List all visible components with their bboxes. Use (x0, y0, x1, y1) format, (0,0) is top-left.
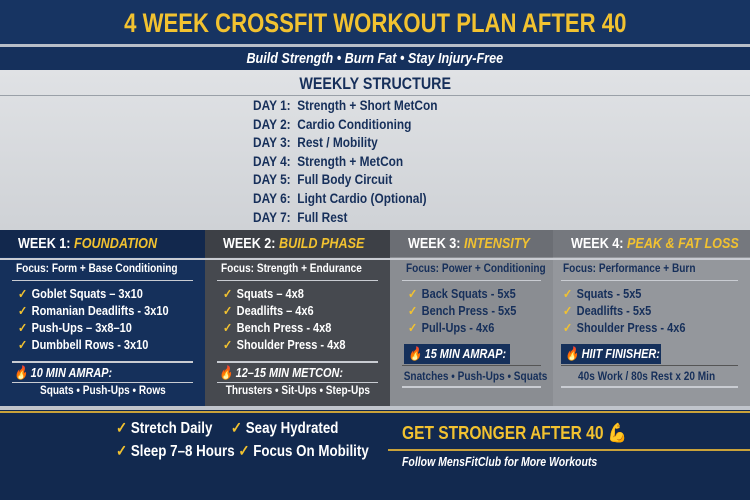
day list: DAY 6: Light Cardio (Optional) (253, 191, 427, 206)
panel: week 4: WEEK 4: PEAK & FAT LOSS (571, 235, 739, 252)
panel: weekly structure (0, 70, 750, 230)
day list: DAY 4: Strength + MetCon (253, 154, 403, 169)
day list: DAY 2: Cardio Conditioning (253, 117, 411, 132)
panel: week 2: ✓ Shoulder Press - 4x8 (223, 338, 345, 352)
panel: week 1: Squats • Push-Ups • Rows (40, 383, 165, 397)
panel: week 2: Thrusters • Sit-Ups • Step-Ups (225, 383, 370, 397)
footer text: Follow MensFitClub for More Workouts (402, 455, 597, 469)
panel: week 4: Focus: Performance + Burn (563, 261, 695, 275)
panel: week 3: ✓ Pull-Ups - 4x6 (408, 321, 494, 335)
title (0, 0, 750, 44)
panel: week 3: ✓ Back Squats - 5x5 (408, 287, 516, 301)
day list: DAY 5: Full Body Circuit (253, 172, 392, 187)
panel: week 2: ✓ Deadlifts – 4x6 (223, 304, 314, 318)
panel: week 2: WEEK 2: BUILD PHASE (223, 235, 364, 252)
day list: DAY 1: Strength + Short MetCon (253, 98, 437, 113)
panel: week 1: WEEK 1: FOUNDATION (18, 235, 157, 252)
panel: week 3: WEEK 3: INTENSITY (408, 235, 530, 252)
tips (116, 420, 369, 460)
day list (253, 98, 437, 225)
label: hiit finisher: 🔥 HIIT FINISHER: (565, 346, 660, 361)
callout: get stronger: GET STRONGER AFTER 40 💪 (402, 422, 627, 443)
panel: week 1: 🔥 10 MIN AMRAP: (14, 365, 112, 380)
panel: week 2: ✓ Bench Press - 4x8 (223, 321, 331, 335)
panel: week 1: Focus: Form + Base Conditioning (16, 261, 178, 275)
heading: weekly structure: WEEKLY STRUCTURE (299, 74, 451, 93)
panel: week 3 (390, 230, 553, 406)
panel: week 3: ✓ Bench Press - 5x5 (408, 304, 516, 318)
panel: week 2 (205, 230, 390, 406)
panel: week 3: Focus: Power + Conditioning (406, 261, 546, 275)
panel: week 2: 🔥 12–15 MIN METCON: (219, 365, 343, 380)
label: 15 min amrap: 🔥 15 MIN AMRAP: (408, 346, 506, 361)
label: 15 min amrap (404, 344, 510, 364)
day list: DAY 7: Full Rest (253, 210, 347, 225)
tips: ✓ Stretch Daily ✓ Seay Hydrated (116, 420, 338, 437)
panel: week 4 (553, 230, 750, 406)
panel: week 4: 40s Work / 80s Rest x 20 Min (578, 369, 715, 383)
panel: week 4: ✓ Shoulder Press - 4x6 (563, 321, 685, 335)
panel: week 4: ✓ Deadlifts - 5x5 (563, 304, 651, 318)
panel: week 2: Focus: Strength + Endurance (221, 261, 362, 275)
panel: week 1: ✓ Push-Ups – 3x8–10 (18, 321, 132, 335)
title: 4 WEEK CROSSFIT WORKOUT PLAN AFTER 40 (124, 8, 626, 38)
panel: week 1: ✓ Dumbbell Rows - 3x10 (18, 338, 148, 352)
subtitle (0, 47, 750, 70)
panel: week 1: ✓ Romanian Deadlifts - 3x10 (18, 304, 169, 318)
panel: week 1: ✓ Goblet Squats – 3x10 (18, 287, 143, 301)
panel: week 3: Snatches • Push-Ups • Squats (404, 369, 547, 383)
panel: week 1 (0, 230, 205, 406)
subtitle: Build Strength • Burn Fat • Stay Injury-Free (247, 50, 503, 67)
day list: DAY 3: Rest / Mobility (253, 135, 378, 150)
tips: ✓ Sleep 7–8 Hours ✓ Focus On Mobility (116, 443, 369, 460)
panel: week 4: ✓ Squats - 5x5 (563, 287, 641, 301)
panel: week 2: ✓ Squats – 4x8 (223, 287, 304, 301)
